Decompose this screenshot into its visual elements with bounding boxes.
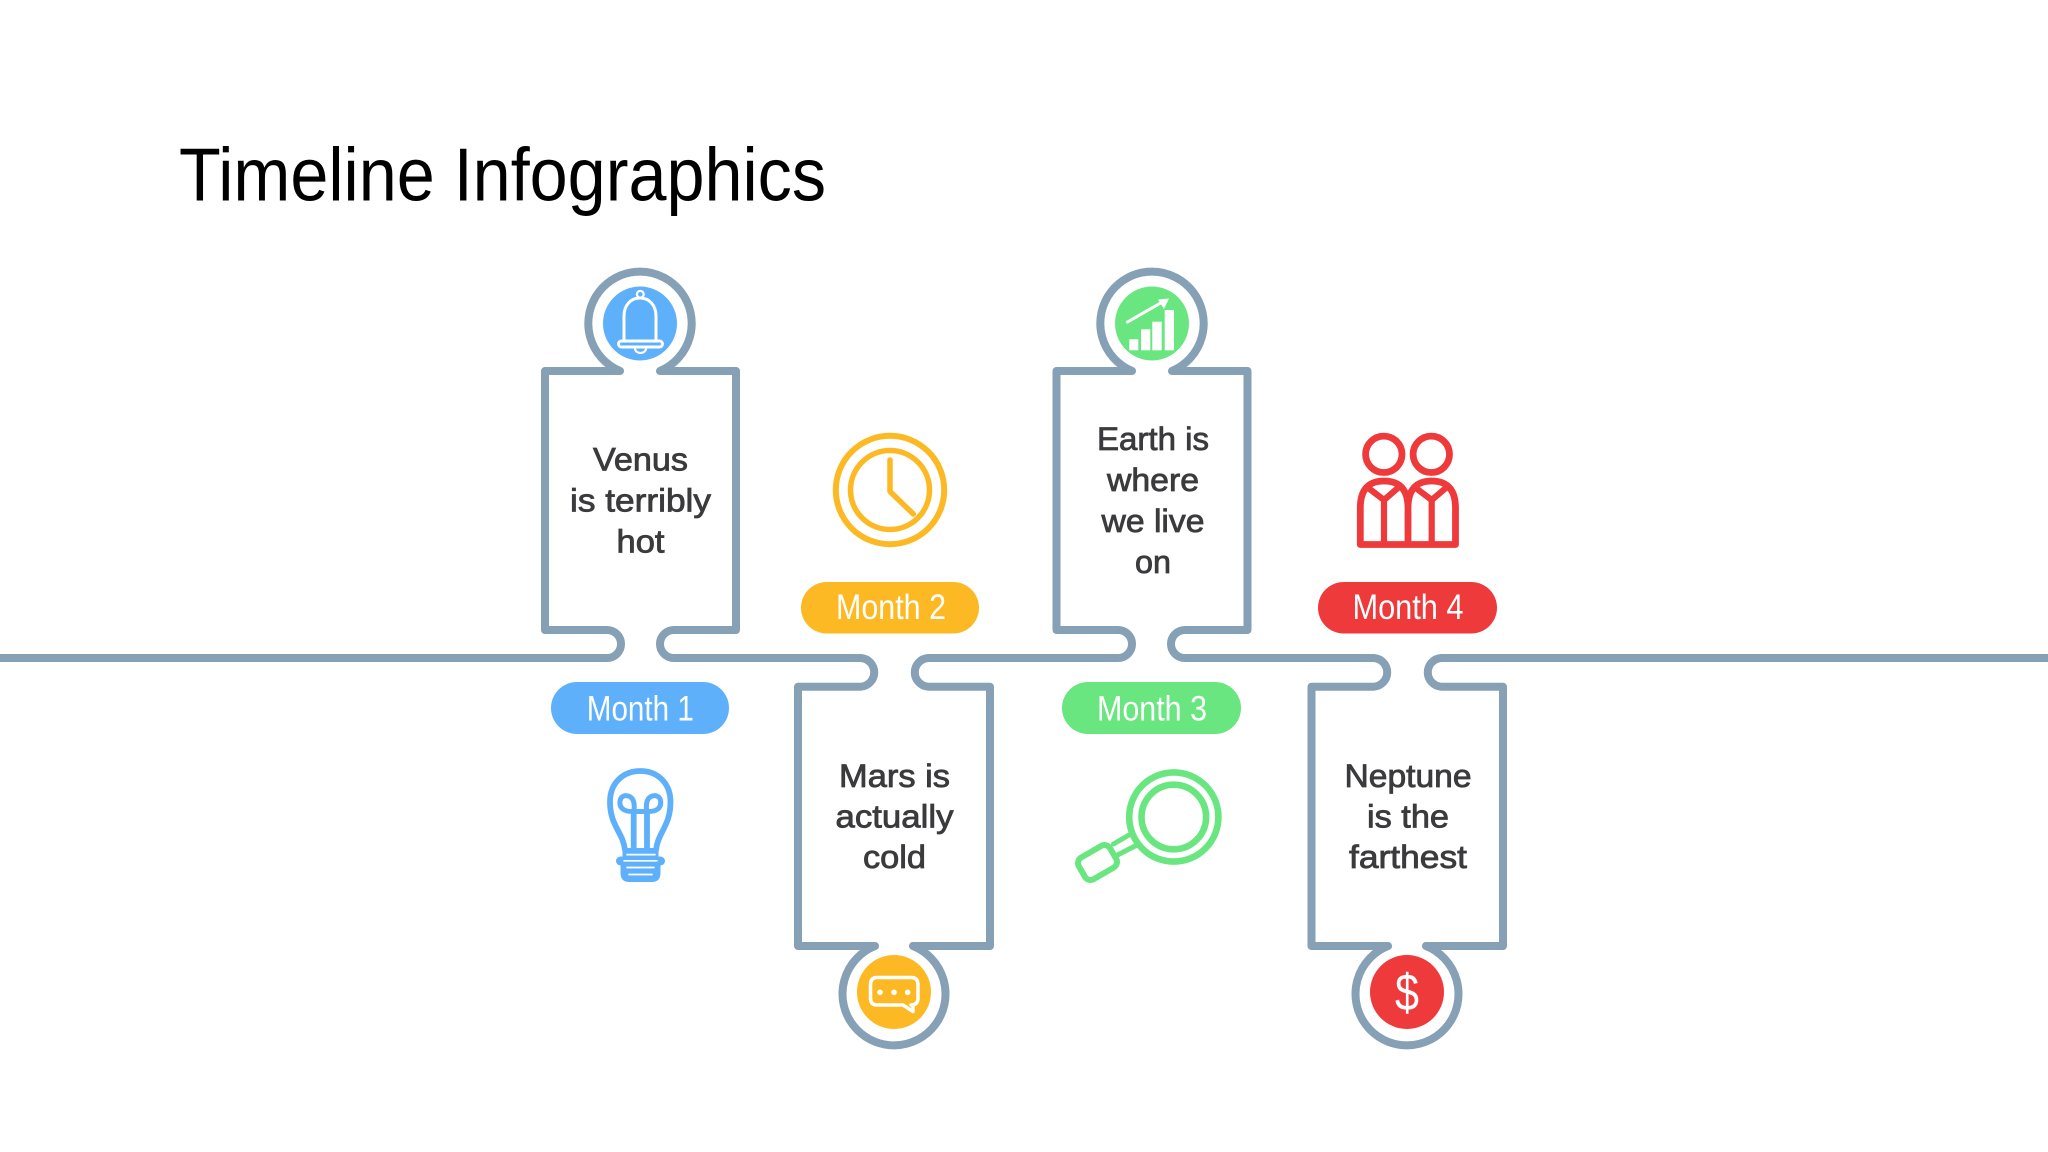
text: Venus: hot <box>616 524 665 560</box>
icon: magnifying glass <box>1076 772 1218 882</box>
text: Venus: is terribly <box>570 482 711 518</box>
panel: month 3 <box>1062 286 1241 882</box>
label: Month 4 <box>1318 582 1497 634</box>
label: Month 1 <box>551 682 729 734</box>
text: Earth <box>1097 421 1209 580</box>
icon: growth chart badge <box>1115 286 1189 360</box>
label: Month 2: Month 2 <box>836 588 946 627</box>
text: Mars: actually <box>836 798 954 834</box>
icon: two people <box>1360 436 1456 544</box>
panel: month 4 <box>1318 436 1497 1029</box>
timeline connector line with boxes <box>0 272 2048 1045</box>
panel: month 1 <box>551 286 729 882</box>
text: Neptune: is the <box>1367 798 1449 834</box>
icon: bell badge <box>603 286 677 360</box>
text: Neptune <box>1344 758 1472 875</box>
icon: dollar badge <box>1370 955 1444 1029</box>
label: Month 3: Month 3 <box>1097 690 1207 729</box>
icon: clock <box>836 436 944 544</box>
label: Month 3 <box>1062 682 1241 734</box>
icon: light bulb <box>610 771 670 882</box>
text: Mars: cold <box>863 839 926 875</box>
text: Earth: we live <box>1100 503 1204 539</box>
text: Venus <box>570 442 711 560</box>
text: Neptune: Neptune <box>1344 758 1472 794</box>
text: Mars: Mars is <box>839 758 950 794</box>
text: Mars <box>836 758 954 875</box>
text: Venus: Venus <box>593 442 688 478</box>
text: Neptune: farthest <box>1349 839 1467 875</box>
panel: month 2 <box>801 436 979 1029</box>
text: Earth: where <box>1106 462 1199 498</box>
text: Earth: Earth is <box>1097 421 1209 457</box>
text: Earth: on <box>1135 544 1171 580</box>
icon: chat badge <box>857 955 931 1029</box>
label: Month 1: Month 1 <box>587 690 694 729</box>
label: Month 4: Month 4 <box>1352 588 1464 627</box>
title: Timeline Infographics <box>179 133 826 217</box>
icon: dollar badge: $ <box>1395 964 1419 1022</box>
label: Month 2 <box>801 582 979 634</box>
